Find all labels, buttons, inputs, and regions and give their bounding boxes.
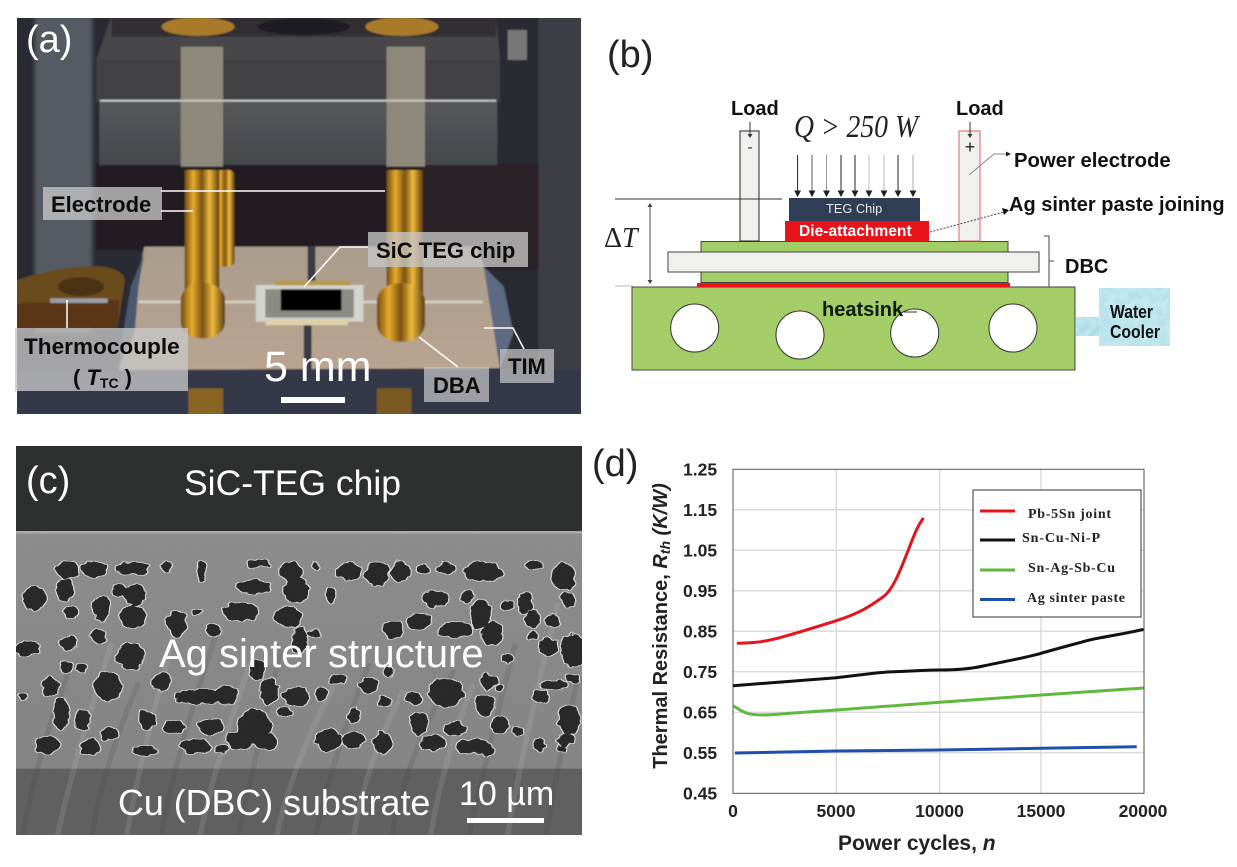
thermocouple callout: ) xyxy=(119,365,132,390)
thermocouple callout: TC xyxy=(100,375,119,391)
chip layer xyxy=(16,446,582,532)
TIM callout xyxy=(484,328,554,383)
negative electrode: - xyxy=(748,139,752,156)
legend xyxy=(973,490,1141,617)
water cooler xyxy=(1076,288,1170,346)
y axis tick labels: 0.45 xyxy=(683,784,717,804)
die attachment: Die-attachment xyxy=(799,223,912,240)
DBA callout xyxy=(419,337,489,402)
TEG chip xyxy=(789,198,920,221)
TEG chip: TEG Chip xyxy=(826,201,882,216)
DBA callout: DBA xyxy=(433,373,481,398)
SiC TEG chip callout: SiC TEG chip xyxy=(376,238,515,263)
plot grid xyxy=(733,469,1144,793)
heatsink: heatsink xyxy=(822,299,904,321)
pores in sintered silver xyxy=(15,561,583,755)
SiC TEG chip callout xyxy=(304,232,528,287)
panel b: cooling schematic xyxy=(604,98,1225,370)
y axis tick labels: 0.75 xyxy=(683,662,717,682)
x axis tick labels: 5000 xyxy=(817,801,856,821)
power electrode label: Power electrode xyxy=(1014,150,1171,172)
heat input label: Q > 250 W xyxy=(794,108,921,144)
panel a: photograph of test setup xyxy=(12,13,588,420)
series: Pb-5Sn joint xyxy=(738,519,923,643)
power electrode label xyxy=(969,150,1171,175)
load labels: Load xyxy=(731,98,779,120)
y axis tick labels: 0.85 xyxy=(683,622,717,642)
y axis tick labels xyxy=(683,460,717,804)
DBC bracket: DBC xyxy=(1065,256,1108,278)
Ag sinter paste label xyxy=(930,194,1225,232)
panel label a: (a) xyxy=(26,19,72,61)
x axis tick labels: 20000 xyxy=(1119,801,1168,821)
negative electrode xyxy=(740,122,759,241)
x axis title: Power cycles, n xyxy=(838,832,996,855)
water cooler: Water xyxy=(1110,302,1153,322)
legend row: Sn-Ag-Sb-Cu: Sn-Ag-Sb-Cu xyxy=(1028,561,1115,576)
thermocouple callout: ( T xyxy=(73,365,100,390)
y axis title: Thermal Resistance, R xyxy=(650,554,672,769)
thermocouple callout xyxy=(15,300,188,391)
y axis tick labels: 1.15 xyxy=(683,500,717,520)
electrode callout xyxy=(43,187,385,220)
photo scene xyxy=(12,13,588,420)
y axis tick labels: 1.05 xyxy=(683,540,717,560)
y axis tick labels: 1.25 xyxy=(683,460,717,480)
y axis tick labels: 0.55 xyxy=(683,743,717,763)
x axis tick labels xyxy=(728,801,1168,821)
delta T dimension xyxy=(604,199,782,286)
load labels: Load xyxy=(956,98,1004,120)
sinter layer micrograph xyxy=(15,531,585,837)
TIM callout: TIM xyxy=(508,354,546,379)
panel label d: (d) xyxy=(592,443,638,485)
panel label b: (b) xyxy=(607,34,653,76)
legend row: Sn-Ag-Sb-Cu xyxy=(980,561,1115,576)
panel d: thermal resistance chart xyxy=(650,460,1168,855)
water cooler: Cooler xyxy=(1110,322,1160,342)
legend row: Ag sinter paste: Ag sinter paste xyxy=(1027,591,1125,606)
electrode callout: Electrode xyxy=(51,192,151,217)
panel c: SEM cross section xyxy=(15,446,585,837)
plot frame xyxy=(733,469,1144,793)
DBC substrate stack xyxy=(668,242,1039,287)
heatsink xyxy=(632,287,1075,370)
thermocouple callout: Thermocouple xyxy=(24,334,180,359)
y axis tick labels: 0.95 xyxy=(683,581,717,601)
legend row: Sn-Cu-Ni-P: Sn-Cu-Ni-P xyxy=(1022,531,1100,546)
series: Sn-Cu-Ni-P xyxy=(733,629,1144,686)
sinter structure label: Ag sinter structure xyxy=(159,632,484,676)
DBC bracket xyxy=(1044,236,1108,287)
legend row: Pb-5Sn joint xyxy=(980,507,1111,522)
x axis tick labels: 0 xyxy=(728,801,738,821)
chip layer label: SiC-TEG chip xyxy=(184,463,401,503)
panel label c: (c) xyxy=(26,460,70,502)
series: Ag sinter paste xyxy=(735,747,1137,753)
series: Sn-Ag-Sb-Cu xyxy=(733,688,1144,715)
y axis tick labels: 0.65 xyxy=(683,702,717,722)
substrate label: Cu (DBC) substrate xyxy=(118,783,430,823)
scale bar 5 mm: 5 mm xyxy=(264,343,372,391)
legend row: Sn-Cu-Ni-P xyxy=(980,531,1100,546)
y axis title: th xyxy=(657,541,673,554)
positive electrode: + xyxy=(965,137,975,157)
y axis title: (K/W) xyxy=(650,483,672,541)
x axis tick labels: 15000 xyxy=(1017,801,1066,821)
heat flow arrows xyxy=(795,155,916,196)
positive electrode xyxy=(959,122,980,241)
Ag sinter paste label: Ag sinter paste joining xyxy=(1009,194,1225,216)
x axis tick labels: 10000 xyxy=(915,801,964,821)
scale bar 10 um: 10 µm xyxy=(459,775,554,813)
delta T dimension: ΔT xyxy=(604,223,640,254)
die attachment xyxy=(785,221,929,242)
legend row: Pb-5Sn joint: Pb-5Sn joint xyxy=(1028,507,1111,522)
load labels xyxy=(731,98,1004,120)
